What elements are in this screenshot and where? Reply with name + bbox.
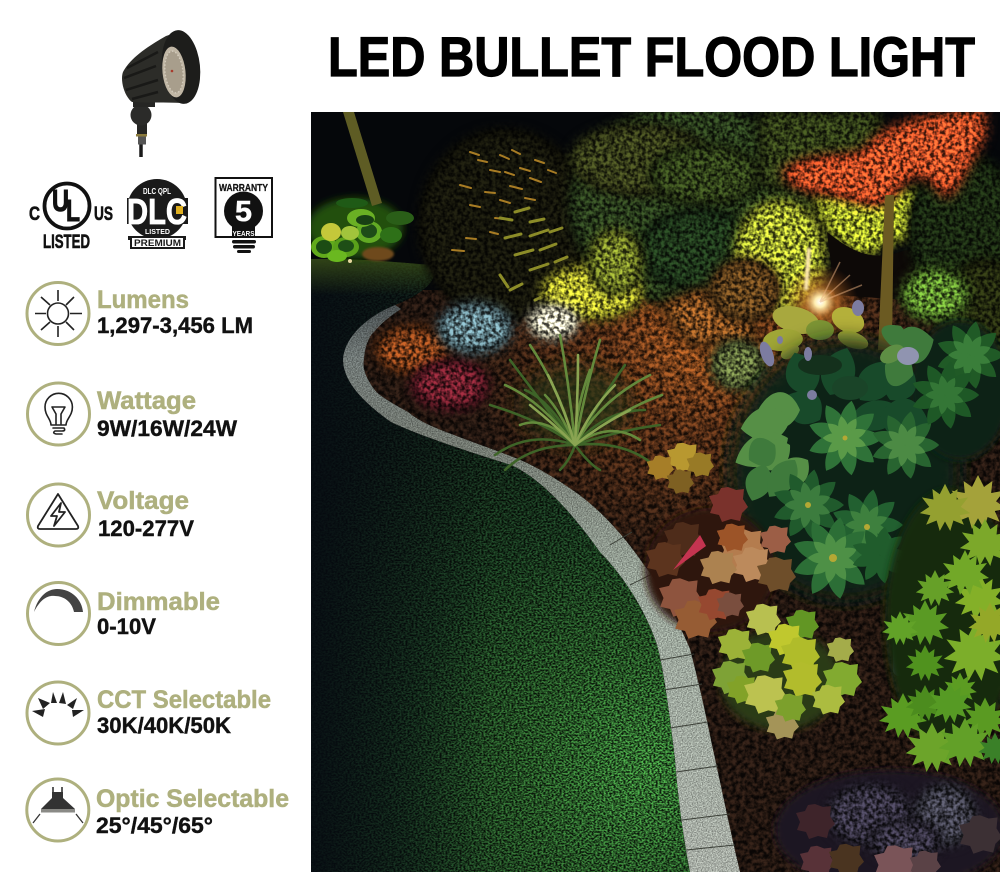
certification: cULus listed: U	[52, 183, 69, 218]
product image: bullet flood light fixture	[122, 28, 204, 157]
icon: electric hazard triangle	[28, 484, 90, 546]
spec row: voltage	[28, 484, 194, 546]
spec row: wattage: 9W/16W/24W	[97, 416, 237, 441]
bright yellow-green heuchera	[712, 604, 862, 739]
icon: light bulb	[28, 383, 90, 445]
certification: 5 year warranty	[216, 178, 272, 253]
spec row: optic selectable	[27, 779, 289, 841]
right conifer	[902, 155, 1000, 360]
lawn	[311, 259, 690, 872]
purple hosta flowers	[757, 300, 919, 400]
mulch bed	[311, 290, 1000, 872]
garden night photo	[307, 105, 1000, 872]
certification: 5 year warranty: 5	[235, 196, 252, 228]
white flowering shrub	[529, 306, 577, 338]
spec row: wattage: Wattage	[97, 387, 196, 415]
certification: cULus listed: LISTED	[43, 232, 90, 253]
icon: sun	[27, 282, 89, 344]
spec row: voltage: Voltage	[97, 487, 189, 515]
lavender shrub	[712, 341, 764, 389]
certification: 5 year warranty: YEARS	[232, 229, 254, 238]
certification: cULus listed: US	[94, 204, 113, 225]
certification: 5 year warranty: WARRANTY	[219, 183, 268, 194]
leaning tree trunk	[343, 112, 382, 206]
icon: sunrise rays	[27, 682, 89, 744]
red heuchera	[412, 361, 488, 409]
icon: dimmer arc	[28, 582, 90, 644]
spec row: CCT selectable: 30K/40K/50K	[97, 713, 231, 738]
spec row: lumens	[27, 282, 253, 344]
spec row: dimmable: Dimmable	[97, 588, 220, 616]
certification: DLC premium: DLC QPL	[143, 187, 171, 196]
spec row: lumens: 1,297-3,456 LM	[97, 313, 253, 338]
maple trunk	[878, 195, 894, 350]
red japanese maple canopy	[782, 112, 985, 205]
green maple plants	[879, 475, 1000, 772]
certification: DLC premium: DLC	[127, 191, 187, 232]
spec row: CCT selectable: CCT Selectable	[97, 686, 271, 714]
dark purple heuchera	[775, 770, 1000, 872]
hosta on far left	[307, 198, 414, 263]
hanging yellow-green foliage	[710, 112, 929, 320]
uplight and lens flare	[782, 248, 862, 340]
spec row: CCT selectable	[27, 682, 271, 744]
ornamental grass	[490, 335, 662, 470]
spec row: wattage	[28, 383, 237, 445]
pale yellow hosta leaves	[763, 306, 868, 360]
certification: cULus listed: C	[29, 204, 40, 225]
lit hedge	[542, 105, 810, 345]
certification: DLC premium: PREMIUM	[134, 238, 181, 249]
copper heuchera	[645, 487, 796, 639]
certification: DLC premium: LISTED	[145, 227, 171, 236]
night sky gap	[827, 232, 903, 300]
certification: cULus listed: L	[66, 193, 80, 228]
orange heuchera	[376, 327, 448, 373]
spec row: optic selectable: 25°/45°/65°	[96, 813, 213, 838]
stone curb edging	[343, 305, 740, 872]
spec row: lumens: Lumens	[97, 286, 189, 314]
spec row: optic selectable: Optic Selectable	[96, 785, 289, 813]
spec row: dimmable: 0-10V	[97, 614, 156, 639]
large rhododendron bush	[729, 318, 1000, 600]
garden path light	[893, 660, 896, 675]
small yellow heuchera	[647, 443, 714, 494]
certification: DLC premium	[127, 179, 188, 249]
icon: MR16 lamp	[27, 779, 89, 841]
spec row: voltage: 120-277V	[98, 516, 194, 541]
blue dwarf conifer	[439, 304, 511, 352]
spec row: dimmable	[28, 582, 220, 644]
certification: cULus listed	[29, 183, 113, 253]
background conifer	[420, 130, 590, 320]
